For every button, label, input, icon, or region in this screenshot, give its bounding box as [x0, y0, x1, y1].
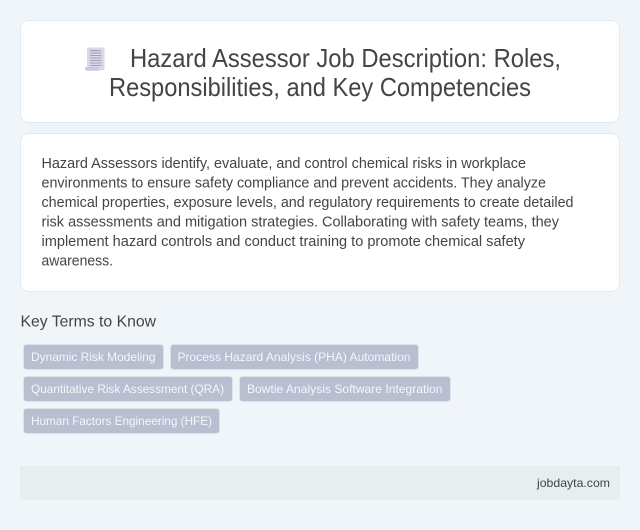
- title: Hazard Assessor Job Description: Roles,: [130, 45, 561, 73]
- tag: process hazard analysis: Process Hazard Analysis (PHA) Automation: [178, 350, 410, 364]
- title: Responsibilities, and Key Competencies: [109, 74, 531, 102]
- heading: key terms: Key Terms to Know: [20, 314, 156, 330]
- text block: description: [42, 156, 574, 270]
- panel: description card: [20, 134, 620, 292]
- tag: quantitative risk assessment: [24, 376, 232, 402]
- text block: description: awareness.: [42, 254, 113, 270]
- footer bar: [20, 466, 620, 500]
- tag: dynamic risk modeling: [24, 344, 164, 370]
- title: [109, 45, 561, 102]
- text block: description: implement hazard controls and conduct training to promote chemical safety: [42, 234, 526, 250]
- tag: quantitative risk assessment: Quantitative Risk Assessment (QRA): [31, 382, 224, 396]
- tag: dynamic risk modeling: Dynamic Risk Modeling: [31, 350, 156, 364]
- text block: description: risk assessments and mitigation strategies. Collaborating with safety teams, they: [42, 214, 560, 230]
- tag: human factors engineering: Human Factors Engineering (HFE): [31, 414, 212, 428]
- tag: process hazard analysis: [170, 344, 418, 370]
- text block: description: environments to ensure safety compliance and prevent accidents. They analyze: [42, 176, 546, 192]
- tag list: key terms: [24, 344, 450, 434]
- panel: title card: [20, 20, 620, 122]
- tag: bowtie analysis: Bowtie Analysis Software Integration: [247, 382, 442, 396]
- tag: bowtie analysis: [240, 376, 450, 402]
- text block: description: Hazard Assessors identify, evaluate, and control chemical risks in workplace: [42, 156, 526, 172]
- text block: description: chemical properties, exposure levels, and regulatory requirements to create detailed: [42, 195, 574, 211]
- footer source text: jobdayta.com: [536, 476, 610, 490]
- icon: receipt scroll: [85, 48, 104, 71]
- tag: human factors engineering: [24, 408, 220, 434]
